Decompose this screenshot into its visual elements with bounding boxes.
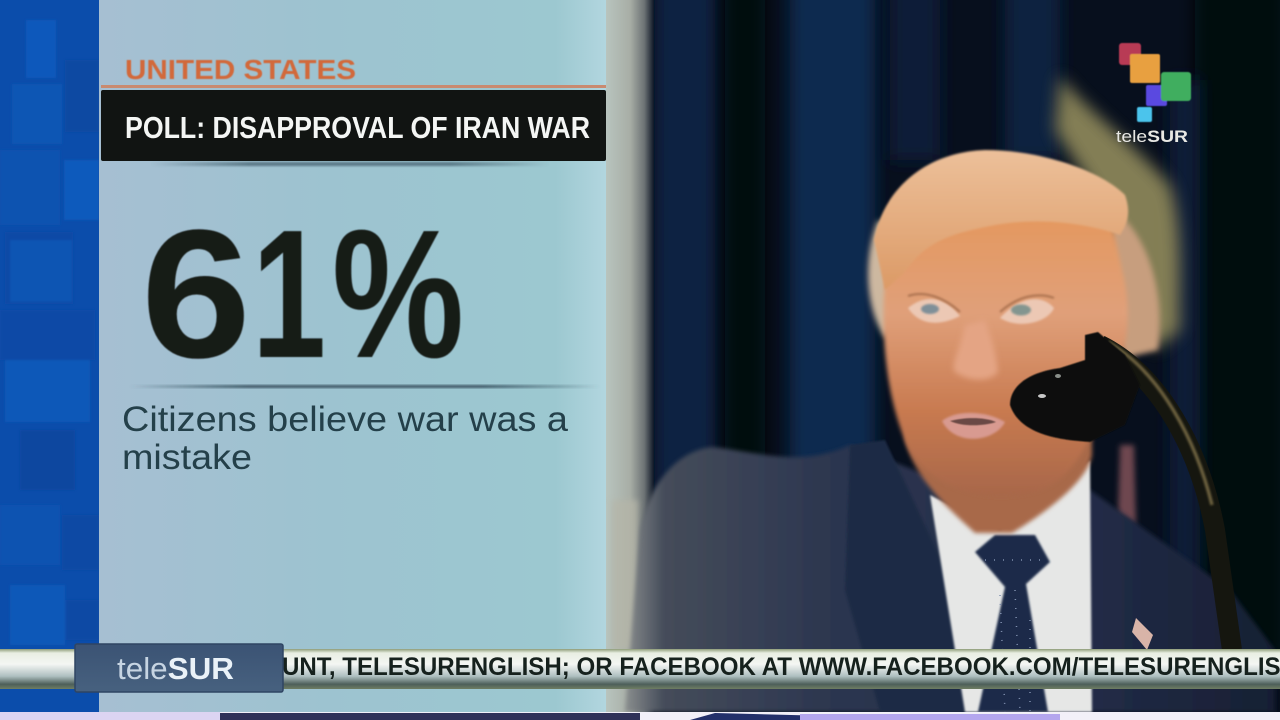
rule above heading [101,85,606,88]
eyes and brows [908,294,1054,324]
ticker logo box [75,644,283,692]
jacket lapel [845,440,967,712]
lapel pin [1132,618,1153,650]
kicker: United States: UNITED STATES [125,54,356,85]
bottom image strip [0,712,1280,720]
big number: 61% [141,191,464,396]
microphone [1010,332,1232,650]
logo squares [1119,43,1191,122]
ticker band [0,649,1280,689]
left blue patterned strip [0,0,99,712]
torn photo edge strip [606,0,654,712]
description text: mistake [122,438,252,477]
ticker logo box: teleSUR [117,651,234,686]
description text: Citizens believe war was a [122,400,569,439]
neck and chin [902,432,1096,536]
nose [954,320,998,380]
necktie [975,535,1050,712]
suit jacket [625,445,1275,712]
heading bar: POLL: DISAPPROVAL OF IRAN WAR [125,110,590,145]
big number: 61%: % [332,191,464,396]
description text [122,400,569,477]
broadcaster logo: teleSUR [1116,127,1188,146]
broadcaster logo [1116,43,1191,146]
heading bar [101,90,606,161]
flag behind speaker [1055,75,1180,350]
panel: poll statistic [99,0,606,712]
photo background: dark blue curtain [640,0,1280,720]
mouth [942,413,1005,439]
face [884,215,1128,496]
photo: speaker at microphone [606,0,1280,720]
swept hair [874,150,1128,290]
big number: 61%: 1 [252,191,326,396]
big number: 61%: 6 [141,191,251,396]
grey side hair [864,217,888,340]
shirt collar [930,460,1092,712]
